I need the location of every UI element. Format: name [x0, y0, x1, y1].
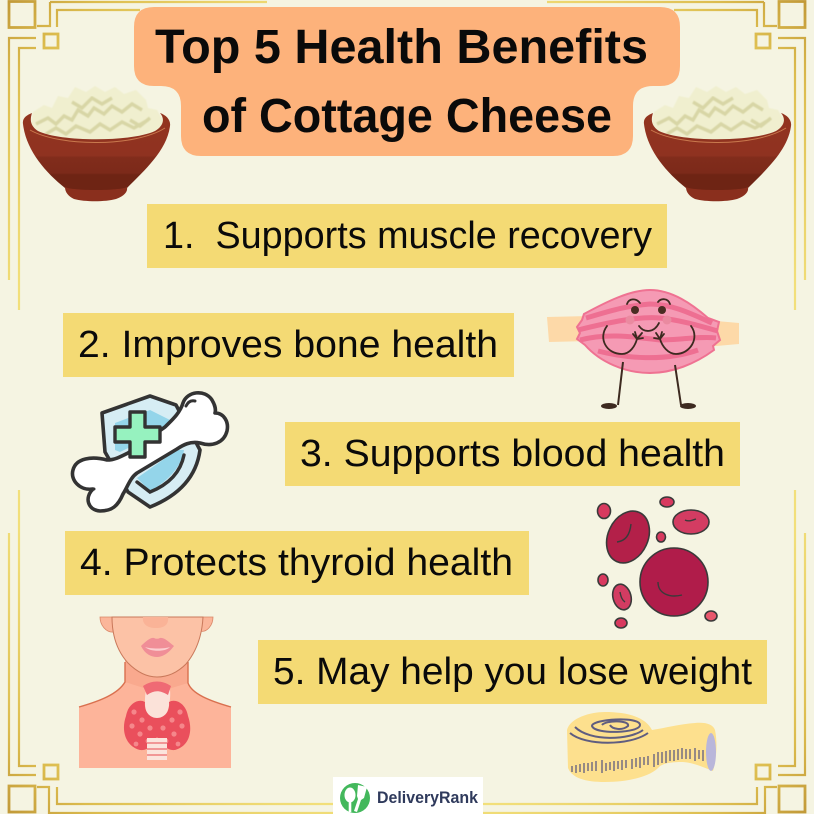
benefit 2 label: [63, 313, 514, 377]
benefit 5 label: 5. May help you lose weight: [273, 651, 752, 693]
benefit 5 label: [258, 640, 767, 704]
benefit 1 label: 1. Supports muscle recovery: [163, 215, 652, 257]
icon: measuring tape: [567, 712, 716, 782]
icon: bone with shield and plus: [72, 393, 227, 511]
title banner: of Cottage Cheese: [202, 90, 612, 143]
benefit 4 label: [65, 531, 529, 595]
benefit 4 label: 4. Protects thyroid health: [80, 542, 513, 584]
icon: muscle character: [547, 290, 739, 409]
logo: DeliveryRank: [333, 777, 483, 814]
title banner: Top 5 Health Benefits: [155, 21, 648, 74]
icon: cottage cheese bowl left: [23, 86, 170, 201]
benefit 3 label: 3. Supports blood health: [300, 433, 725, 475]
icon: cottage cheese bowl right: [644, 86, 791, 201]
benefit 1 label: [147, 204, 667, 268]
benefit 3 label: [285, 422, 740, 486]
logo: DeliveryRank: DeliveryRank: [377, 789, 479, 807]
icon: red blood cells: [598, 497, 717, 628]
title banner: [134, 7, 680, 156]
icon: neck and thyroid: [79, 617, 231, 768]
benefit 2 label: 2. Improves bone health: [78, 324, 498, 366]
